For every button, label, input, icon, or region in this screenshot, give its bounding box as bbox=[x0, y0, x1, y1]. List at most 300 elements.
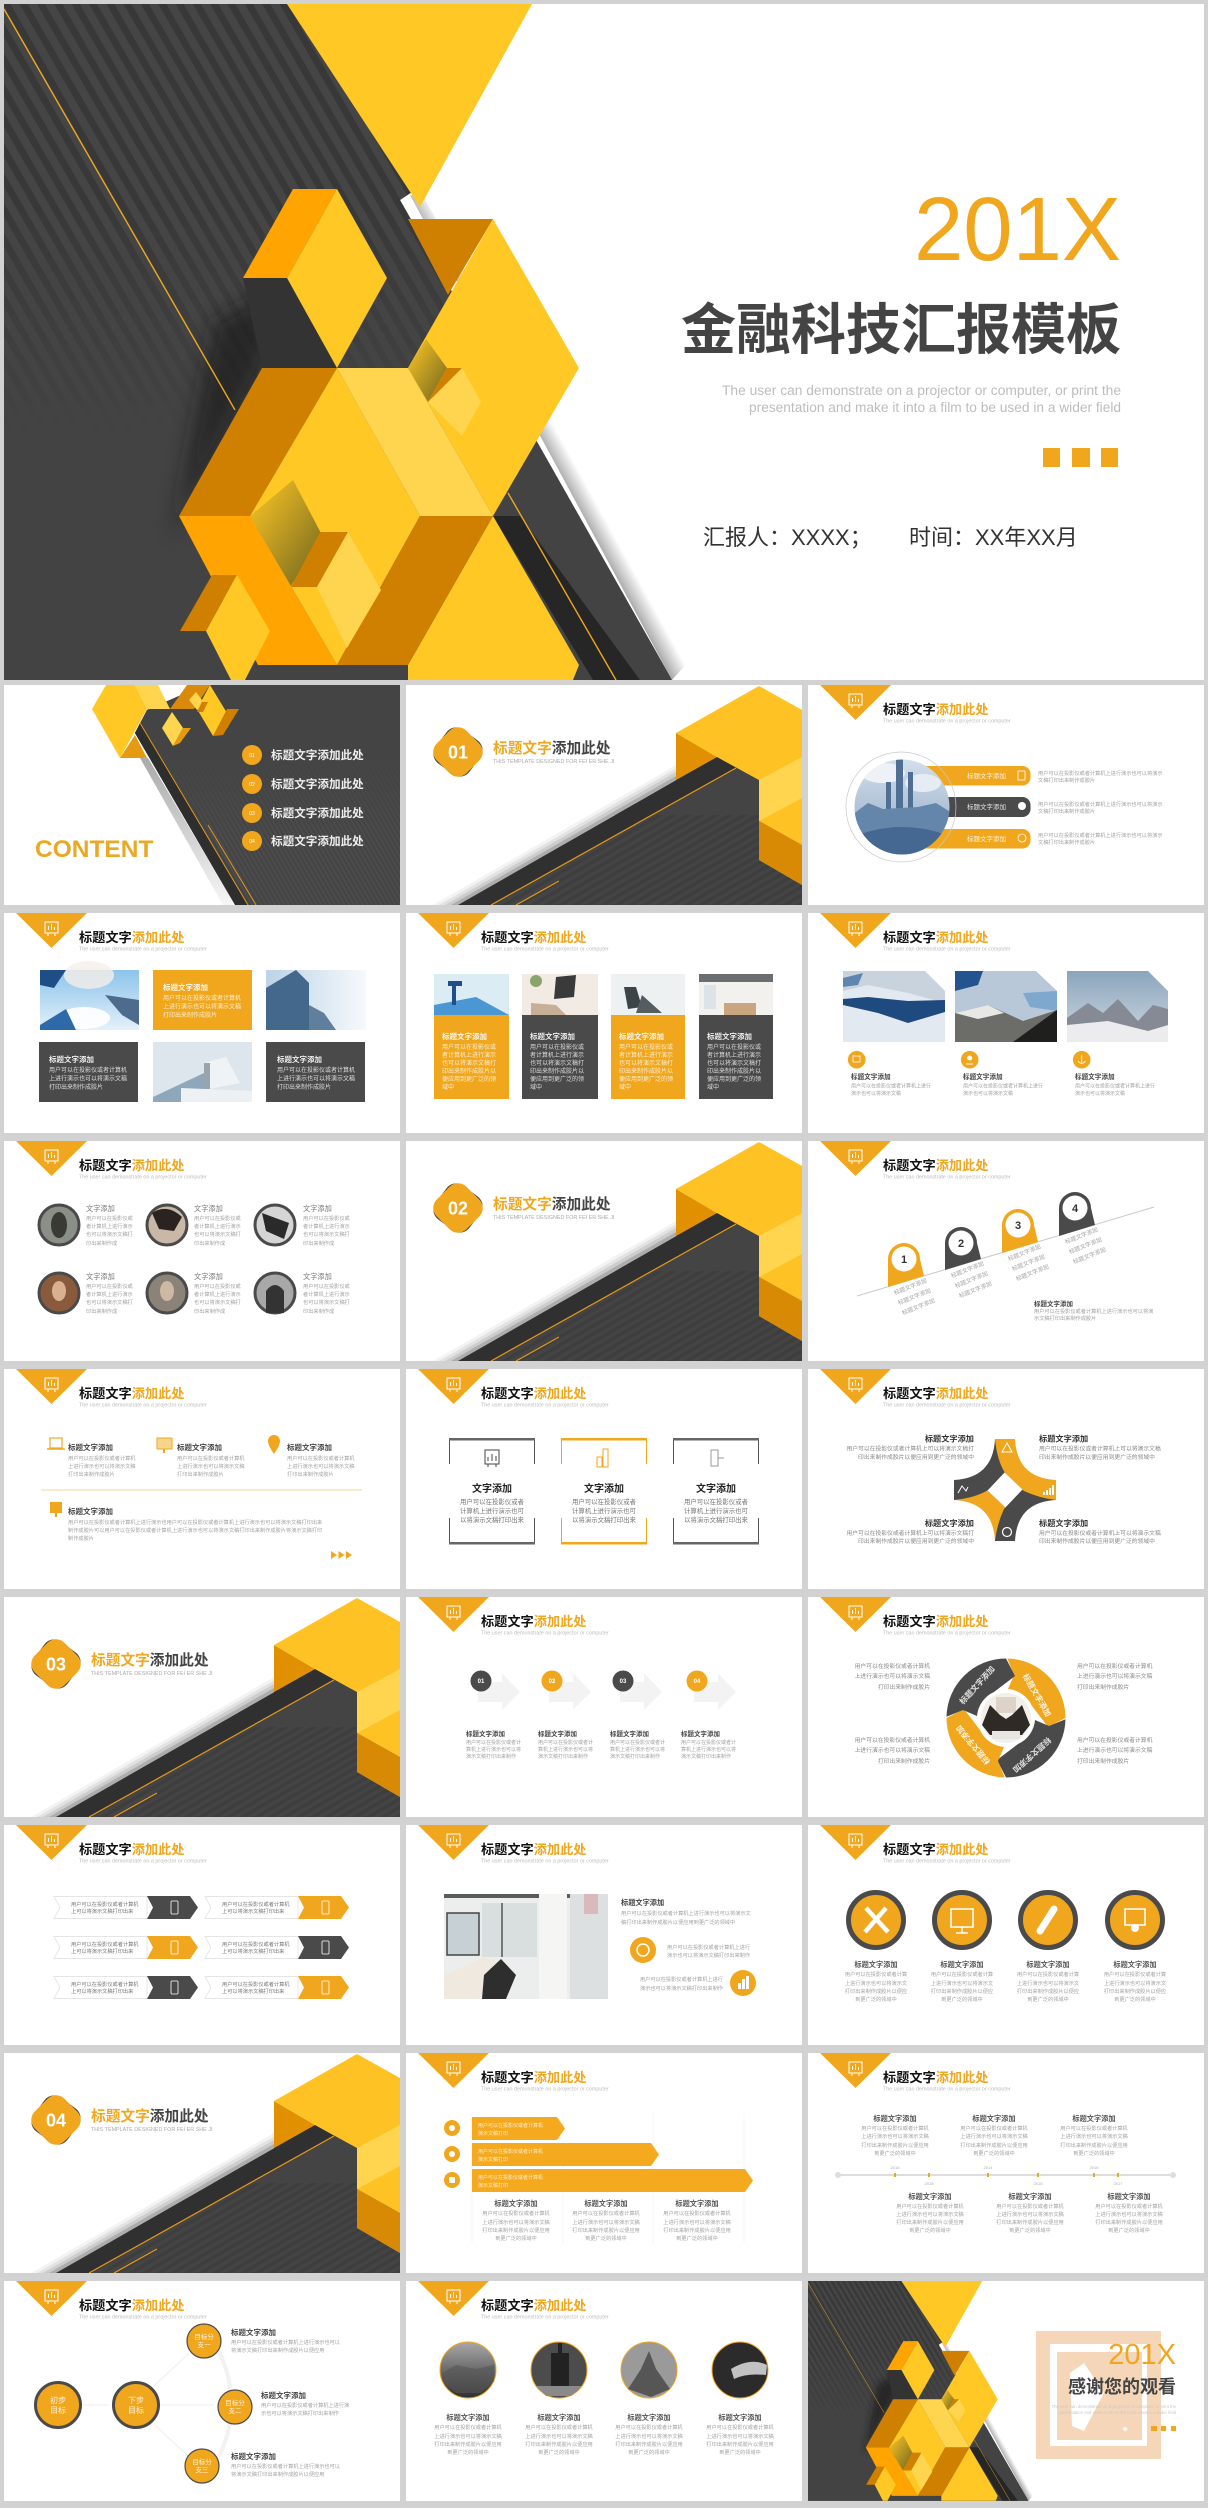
column 2: 标题文字添加 bbox=[530, 1031, 575, 1041]
column 1: 用户可以在投影仪或者计算机 bbox=[482, 2209, 551, 2217]
main title: 金融科技汇报模板 bbox=[681, 299, 1121, 361]
office photo bbox=[444, 1894, 608, 1999]
left lower text bbox=[855, 1736, 930, 1765]
header: The user can demonstrate on a projector or computer bbox=[883, 718, 1011, 724]
column 4: 域中 bbox=[707, 1083, 719, 1091]
column 2 bbox=[522, 974, 598, 1099]
city 2: 打印出来制作成胶片以便应用 bbox=[525, 2440, 593, 2448]
city 1: 用户可以在投影仪或者计算机 bbox=[434, 2423, 503, 2431]
cover artwork: hexagon shapes on dark stripes bbox=[4, 4, 690, 680]
city 4: 打印出来制作成胶片以便应用 bbox=[706, 2440, 774, 2448]
branch 3: 标题文字添加 bbox=[231, 2451, 276, 2461]
city photo circle bbox=[846, 752, 956, 862]
city 1: 上进行演示也可以将演示文稿 bbox=[434, 2432, 502, 2440]
top text 1: 上进行演示也可以将演示文稿 bbox=[861, 2132, 929, 2140]
orange text box: 打印出来制作成胶片 bbox=[163, 1011, 217, 1019]
step 4: 算机上进行演示也可以将 bbox=[681, 1746, 736, 1753]
section subtitle: THIS TEMPLATE DESIGNED FOR FEI ER SHE JI bbox=[493, 1215, 614, 1221]
person 1: 文字添加 bbox=[86, 1204, 115, 1213]
top text 3: 到更广泛的领域中 bbox=[1073, 2149, 1115, 2157]
header: The user can demonstrate on a projector or computer bbox=[883, 946, 1011, 952]
header: The user can demonstrate on a projector or computer bbox=[883, 1858, 1011, 1864]
column 4: 便应用到更广泛的领 bbox=[707, 1075, 761, 1083]
frame card 3: 计算机上进行演示也可 bbox=[684, 1506, 749, 1515]
column 2: 到更广泛的领域中 bbox=[585, 2234, 627, 2242]
frame card 1 bbox=[449, 1438, 535, 1544]
pill 1 bbox=[918, 766, 1030, 786]
header: 标题文字添加此处 bbox=[883, 1613, 988, 1629]
rotated captions: 标题文字添加 bbox=[901, 1296, 936, 1317]
top text 3 bbox=[1060, 2114, 1129, 2157]
column 2: 用户可以在投影仪或 bbox=[530, 1043, 584, 1051]
header: The user can demonstrate on a projector or computer bbox=[481, 1858, 609, 1864]
feature 1: 标题文字添加 bbox=[851, 1072, 891, 1081]
bottom text 1: 打印出来制作成胶片以便应用 bbox=[896, 2218, 964, 2226]
circle 4 certificate bbox=[1104, 1892, 1167, 2003]
column 3: 域中 bbox=[619, 1083, 631, 1091]
circle 4 certificate: 上进行演示也可以将演示文 bbox=[1104, 1979, 1167, 1987]
column 2: 用户可以在投影仪或者计算机 bbox=[572, 2209, 641, 2217]
slide: staggered arrow bars bbox=[406, 2053, 802, 2273]
panel: cover slide bbox=[4, 4, 1204, 680]
column 3: 者计算机上进行演示 bbox=[619, 1051, 673, 1059]
right lower text bbox=[1077, 1736, 1153, 1765]
column 3: 用户可以在投影仪或者计算机 bbox=[663, 2209, 732, 2217]
ring diagram bbox=[946, 1658, 1066, 1778]
top text 2: 用户可以在投影仪或者计算机 bbox=[960, 2124, 1029, 2132]
number badge 01 bbox=[433, 727, 483, 777]
note text: 用户可以在投影仪或者计算机上进行演示也可以将演示文 bbox=[621, 1909, 752, 1917]
step 2: 02 bbox=[549, 1679, 556, 1685]
left upper text: 用户可以在投影仪或者计算机 bbox=[855, 1662, 930, 1670]
rotated captions: 标题文字添加 bbox=[950, 1259, 985, 1280]
stamp watermark bbox=[1036, 2331, 1161, 2459]
dark text box bbox=[266, 1042, 365, 1102]
column 1: 标题文字添加 bbox=[442, 1031, 487, 1041]
top right text bbox=[1039, 1434, 1161, 1461]
column 1: 也可以将演示文稿打 bbox=[442, 1059, 496, 1067]
bottom text 3 bbox=[1095, 2192, 1164, 2234]
header bbox=[820, 685, 1011, 724]
slide: four city circles bbox=[406, 2281, 802, 2501]
agenda list: 03 bbox=[249, 811, 255, 817]
header bbox=[16, 2281, 207, 2320]
photo: white architecture bbox=[153, 1042, 252, 1102]
right lower text: 打印出来制作成胶片 bbox=[1077, 1757, 1129, 1765]
city 3 bbox=[615, 2342, 684, 2456]
agenda list: 标题文字添加此处 bbox=[271, 834, 364, 848]
slide: city circle with three pills bbox=[808, 685, 1204, 905]
feature 3: 打印出来制作成胶片 bbox=[287, 1470, 334, 1478]
person 1: 印出来制作成 bbox=[86, 1239, 117, 1247]
city 4: 标题文字添加 bbox=[718, 2413, 762, 2422]
subtitle: The user can demonstrate on a projector or computer, or print the bbox=[722, 383, 1121, 398]
header: The user can demonstrate on a projector or computer bbox=[79, 1402, 207, 1408]
tag 3: 上可以将演示文稿打印出来 bbox=[71, 1947, 134, 1955]
branch 3: 支三 bbox=[196, 2465, 209, 2474]
feature 1: 上进行演示也可以将演示文稿 bbox=[68, 1462, 135, 1470]
header bbox=[16, 1141, 207, 1180]
slide: section 02 bbox=[406, 1141, 802, 1361]
frame card 2: 以将演示文稿打印出来 bbox=[572, 1515, 637, 1524]
column 1: 域中 bbox=[442, 1083, 454, 1091]
header: 标题文字添加此处 bbox=[883, 929, 988, 945]
reporter and time: 汇报人：XXXX； bbox=[703, 525, 872, 550]
left upper text: 打印出来制作成胶片 bbox=[878, 1683, 930, 1691]
icon note 1: 用户可以在投影仪或者计算机上进行 bbox=[667, 1943, 750, 1951]
circle 3 tube: 打印出来制作成胶片以便应 bbox=[1017, 1987, 1079, 1995]
person 3: 文字添加 bbox=[303, 1204, 332, 1213]
top left text: 用户可以在投影仪或者计算机上可以将演示文稿打 bbox=[846, 1444, 974, 1452]
person 3 bbox=[255, 1204, 350, 1247]
feature wide: 制作成胶片 bbox=[68, 1534, 94, 1542]
top text 2 bbox=[960, 2114, 1029, 2157]
top left text bbox=[846, 1434, 974, 1461]
pill descriptions: 用户可以在投影仪或者计算机上进行演示也可以将演示 bbox=[1038, 831, 1163, 839]
header bbox=[820, 1369, 1011, 1408]
feature 2: 标题文字添加 bbox=[963, 1072, 1003, 1081]
column 3: 印出来制作成胶片以 bbox=[619, 1067, 673, 1075]
circle 2 monitor: 标题文字添加 bbox=[940, 1960, 984, 1969]
tag 2: 上可以将演示文稿打印出来 bbox=[222, 1907, 285, 1915]
branch 2: 示也可以将演示文稿打印出来制作 bbox=[261, 2409, 339, 2417]
person 3: 也可以将演示文稿打 bbox=[303, 1230, 350, 1238]
person 5: 也可以将演示文稿打 bbox=[194, 1298, 241, 1306]
branch 1: 标题文字添加 bbox=[231, 2327, 276, 2337]
number badge 01: 01 bbox=[448, 742, 468, 762]
person 5: 者计算机上进行演示 bbox=[194, 1290, 241, 1298]
section title: 标题文字添加此处 bbox=[91, 1651, 209, 1669]
person 4: 文字添加 bbox=[86, 1272, 115, 1281]
small caption: presentation and make it into a film to be used in a wider field bbox=[1059, 2410, 1177, 2415]
header: 标题文字添加此处 bbox=[481, 1385, 586, 1401]
pill descriptions bbox=[1038, 769, 1163, 846]
frame card 3 bbox=[673, 1438, 759, 1544]
top text 3: 上进行演示也可以将演示文稿 bbox=[1060, 2132, 1128, 2140]
header: The user can demonstrate on a projector or computer bbox=[481, 946, 609, 952]
right upper text: 打印出来制作成胶片 bbox=[1077, 1683, 1129, 1691]
person 3: 者计算机上进行演示 bbox=[303, 1222, 350, 1230]
feature 1: 打印出来制作成胶片 bbox=[68, 1470, 115, 1478]
tag 2 bbox=[205, 1896, 349, 1919]
feature 1 bbox=[47, 1438, 136, 1478]
person 1: 者计算机上进行演示 bbox=[86, 1222, 133, 1230]
column 2: 域中 bbox=[530, 1083, 542, 1091]
left lower text: 上进行演示也可以将演示文稿 bbox=[855, 1746, 930, 1754]
rotated captions bbox=[893, 1225, 1107, 1317]
pill descriptions: 文稿打印出来制作成胶片 bbox=[1038, 776, 1095, 784]
header: The user can demonstrate on a projector or computer bbox=[883, 2086, 1011, 2092]
bottom text 2: 用户可以在投影仪或者计算机 bbox=[996, 2202, 1065, 2210]
header: The user can demonstrate on a projector or computer bbox=[883, 1174, 1011, 1180]
step 3: 用户可以在投影仪或者计 bbox=[610, 1739, 665, 1746]
bottom text 2: 标题文字添加 bbox=[1008, 2192, 1052, 2201]
header: The user can demonstrate on a projector or computer bbox=[79, 946, 207, 952]
person 4: 印出来制作成 bbox=[86, 1307, 117, 1315]
column 2: 也可以将演示文稿打 bbox=[530, 1059, 584, 1067]
header: 标题文字添加此处 bbox=[79, 1841, 184, 1857]
bar 3: 演示文稿打印 bbox=[478, 2182, 508, 2189]
dark text box: 上进行演示也可以将演示文稿 bbox=[49, 1074, 127, 1082]
header: The user can demonstrate on a projector or computer bbox=[481, 2086, 609, 2092]
feature 2: 打印出来制作成胶片 bbox=[177, 1470, 224, 1478]
header bbox=[16, 913, 207, 952]
branch 2: 标题文字添加 bbox=[261, 2390, 306, 2400]
column 2: 便应用到更广泛的领 bbox=[530, 1075, 584, 1083]
column 1: 上进行演示也可以将演示文稿 bbox=[482, 2218, 550, 2226]
section title: 标题文字添加此处 bbox=[91, 2107, 209, 2125]
pill 3 bbox=[918, 829, 1030, 848]
bottom text 2: 到更广泛的领域中 bbox=[1009, 2226, 1051, 2234]
slide: section 01 bbox=[406, 685, 802, 905]
column 1: 便应用到更广泛的领 bbox=[442, 1075, 496, 1083]
bottom text 1: 到更广泛的领域中 bbox=[909, 2226, 951, 2234]
year heading: 201X bbox=[914, 180, 1121, 280]
feature wide bbox=[50, 1502, 323, 1542]
header bbox=[418, 1597, 609, 1636]
branch 1: 目标分 bbox=[194, 2332, 214, 2341]
dark text box: 用户可以在投影仪或者计算机 bbox=[277, 1066, 355, 1074]
bottom left text bbox=[846, 1518, 974, 1545]
circle 1 tools: 打印出来制作成胶片以便应 bbox=[845, 1987, 907, 1995]
city 3: 到更广泛的领域中 bbox=[628, 2448, 670, 2456]
column 3: 标题文字添加 bbox=[675, 2199, 719, 2208]
timeline axis bbox=[835, 2165, 1176, 2186]
bottom text 3: 打印出来制作成胶片以便应用 bbox=[1095, 2218, 1163, 2226]
pin 1 bbox=[888, 1243, 924, 1287]
pill 2: 标题文字添加 bbox=[967, 802, 1006, 811]
city 2 bbox=[525, 2342, 594, 2456]
person 4: 用户可以在投影仪或 bbox=[86, 1282, 133, 1290]
pin 2: 2 bbox=[958, 1238, 964, 1250]
frame card 1: 计算机上进行演示也可 bbox=[460, 1506, 525, 1515]
number badge 04: 04 bbox=[46, 2110, 66, 2130]
top text 2: 标题文字添加 bbox=[972, 2114, 1016, 2123]
header bbox=[418, 913, 609, 952]
section title: 标题文字添加此处 bbox=[493, 739, 611, 757]
star diagram bbox=[954, 1439, 1056, 1541]
number badge 02: 02 bbox=[448, 1198, 468, 1218]
tag 4: 用户可以在投影仪或者计算机 bbox=[222, 1940, 290, 1948]
person 5: 印出来制作成 bbox=[194, 1307, 225, 1315]
dark text box: 打印出来制作成胶片 bbox=[277, 1083, 331, 1091]
header: 标题文字添加此处 bbox=[79, 1385, 184, 1401]
ring diagram: 标题文字添加 bbox=[957, 1664, 997, 1706]
person 3: 用户可以在投影仪或 bbox=[303, 1214, 350, 1222]
slide: six portraits bbox=[4, 1141, 400, 1361]
header: 标题文字添加此处 bbox=[481, 929, 586, 945]
circle 1 tools: 上进行演示也可以将演示文 bbox=[845, 1979, 908, 1987]
tag 6 bbox=[205, 1976, 349, 1999]
column 3: 便应用到更广泛的领 bbox=[619, 1075, 673, 1083]
branch 2: 目标分 bbox=[225, 2398, 245, 2407]
city 2: 到更广泛的领域中 bbox=[538, 2448, 580, 2456]
bottom text 3: 用户可以在投影仪或者计算机 bbox=[1095, 2202, 1164, 2210]
city 1 bbox=[434, 2342, 503, 2456]
top text 2: 打印出来制作成胶片以便应用 bbox=[960, 2141, 1028, 2149]
frame card 2: 计算机上进行演示也可 bbox=[572, 1506, 637, 1515]
bottom text 1 bbox=[896, 2192, 965, 2234]
bottom text 1: 标题文字添加 bbox=[908, 2192, 952, 2201]
person 3: 印出来制作成 bbox=[303, 1239, 334, 1247]
top text 2: 上进行演示也可以将演示文稿 bbox=[960, 2132, 1028, 2140]
step 2: 标题文字添加 bbox=[538, 1729, 577, 1738]
branch 2: 用户可以在投影仪或者计算机上进行演 bbox=[261, 2401, 349, 2409]
feature 3: 上进行演示也可以将演示文稿 bbox=[287, 1462, 354, 1470]
timeline axis: 2016 bbox=[891, 2165, 900, 2170]
feature 3: 标题文字添加 bbox=[287, 1442, 332, 1452]
reporter and time: 时间：XX年XX月 bbox=[909, 525, 1078, 550]
slide: thank you bbox=[808, 2281, 1204, 2501]
slide: ring cycle bbox=[808, 1597, 1204, 1817]
header: 标题文字添加此处 bbox=[481, 1613, 586, 1629]
pin 3: 3 bbox=[1015, 1220, 1021, 1232]
column 3: 用户可以在投影仪或 bbox=[619, 1043, 673, 1051]
person 2: 也可以将演示文稿打 bbox=[194, 1230, 241, 1238]
note text: 稿打印出来制作成胶片以便应用到更广泛的领域中 bbox=[621, 1918, 735, 1926]
header bbox=[16, 1825, 207, 1864]
header: 标题文字添加此处 bbox=[79, 929, 184, 945]
bottom left text: 印出来制作成胶片以便应用到更广泛的领域中 bbox=[858, 1537, 974, 1545]
mountain photo 1 bbox=[843, 971, 945, 1042]
rotated captions: 标题文字添加 bbox=[893, 1276, 928, 1297]
header: The user can demonstrate on a projector or computer bbox=[481, 2314, 609, 2320]
header bbox=[820, 1141, 1011, 1180]
tag 6: 用户可以在投影仪或者计算机 bbox=[222, 1980, 290, 1988]
tag 1: 用户可以在投影仪或者计算机 bbox=[71, 1900, 139, 1908]
header bbox=[820, 2053, 1011, 2092]
header: 标题文字添加此处 bbox=[481, 1841, 586, 1857]
section subtitle: THIS TEMPLATE DESIGNED FOR FEI ER SHE JI bbox=[91, 2127, 212, 2133]
circle 4 certificate: 标题文字添加 bbox=[1113, 1960, 1157, 1969]
person 6: 印出来制作成 bbox=[303, 1307, 334, 1315]
slide: three mountains bbox=[808, 913, 1204, 1133]
bar 2: 演示文稿打印 bbox=[478, 2156, 508, 2163]
node: next goal bbox=[114, 2382, 158, 2428]
step 1: 标题文字添加 bbox=[466, 1729, 505, 1738]
rotated captions: 标题文字添加 bbox=[1072, 1245, 1107, 1266]
column 4: 标题文字添加 bbox=[707, 1031, 752, 1041]
bottom text 3: 标题文字添加 bbox=[1107, 2192, 1151, 2201]
header: The user can demonstrate on a projector or computer bbox=[883, 1402, 1011, 1408]
dark text box: 标题文字添加 bbox=[277, 1054, 322, 1064]
orange text box: 标题文字添加 bbox=[163, 982, 208, 992]
pin 1: 1 bbox=[901, 1254, 907, 1266]
city 1: 标题文字添加 bbox=[446, 2413, 490, 2422]
bottom left text: 标题文字添加 bbox=[925, 1518, 974, 1528]
step 4 bbox=[681, 1670, 736, 1760]
header bbox=[820, 1597, 1011, 1636]
step 1: 01 bbox=[478, 1679, 485, 1685]
three squares bbox=[1151, 2426, 1176, 2431]
feature 2 bbox=[961, 1051, 1043, 1097]
circle 4 certificate: 用户可以在投影仪或者计算 bbox=[1104, 1970, 1166, 1978]
dark text box: 标题文字添加 bbox=[49, 1054, 94, 1064]
pin 2 bbox=[945, 1227, 981, 1270]
city 3: 上进行演示也可以将演示文稿 bbox=[615, 2432, 683, 2440]
header bbox=[418, 1369, 609, 1408]
circle 1 tools: 标题文字添加 bbox=[854, 1960, 898, 1969]
person 1 bbox=[39, 1204, 133, 1247]
column 4 bbox=[699, 974, 773, 1099]
column 1: 用户可以在投影仪或 bbox=[442, 1043, 496, 1051]
person 4: 者计算机上进行演示 bbox=[86, 1290, 133, 1298]
pill 2 bbox=[948, 797, 1030, 817]
icons bbox=[444, 2120, 460, 2188]
icon note 2: 用户可以在投影仪或者计算机上进行 bbox=[640, 1975, 723, 1983]
frame card 3: 以将演示文稿打印出来 bbox=[684, 1515, 749, 1524]
pill descriptions: 用户可以在投影仪或者计算机上进行演示也可以将演示 bbox=[1038, 800, 1163, 808]
tag 1: 上可以将演示文稿打印出来 bbox=[71, 1907, 134, 1915]
header: 标题文字添加此处 bbox=[481, 2069, 586, 2085]
agenda list: 01 bbox=[249, 753, 255, 759]
number badge 02 bbox=[428, 1178, 488, 1238]
slide: four step arrows bbox=[406, 1597, 802, 1817]
step 1 bbox=[466, 1670, 521, 1760]
bottom text 2: 打印出来制作成胶片以便应用 bbox=[996, 2218, 1064, 2226]
header: 标题文字添加此处 bbox=[883, 701, 988, 717]
step 3 bbox=[610, 1670, 665, 1760]
feature 1: 演示也可以将演示文稿 bbox=[851, 1090, 901, 1097]
pill 3: 标题文字添加 bbox=[967, 834, 1006, 843]
bottom note: 用户可以在投影仪或者计算机上进行演示也可以将演 bbox=[1034, 1307, 1153, 1315]
agenda list: 02 bbox=[249, 782, 255, 788]
header bbox=[418, 2281, 609, 2320]
column 1: 者计算机上进行演示 bbox=[442, 1051, 496, 1059]
tag 5: 用户可以在投影仪或者计算机 bbox=[71, 1980, 139, 1988]
bottom right text bbox=[1039, 1518, 1161, 1545]
step 4: 04 bbox=[694, 1679, 701, 1685]
tag 3 bbox=[54, 1936, 198, 1959]
city 3: 标题文字添加 bbox=[627, 2413, 671, 2422]
branch 3: 用户可以在投影仪或者计算机上进行演示也可以 bbox=[231, 2462, 340, 2470]
pin 3 bbox=[1002, 1209, 1038, 1253]
feature 3 bbox=[268, 1435, 355, 1478]
person 6: 也可以将演示文稿打 bbox=[303, 1298, 350, 1306]
small caption bbox=[1052, 2404, 1177, 2415]
note text: 标题文字添加 bbox=[621, 1898, 664, 1907]
top text 1 bbox=[861, 2114, 930, 2157]
city 1: 到更广泛的领域中 bbox=[447, 2448, 489, 2456]
small caption: The user can demonstrate on a projector or computer, or print the bbox=[1052, 2404, 1177, 2409]
left upper text: 上进行演示也可以将演示文稿 bbox=[855, 1672, 930, 1680]
column 2 bbox=[572, 2199, 641, 2242]
column 2: 上进行演示也可以将演示文稿 bbox=[572, 2218, 640, 2226]
feature 1 bbox=[848, 1051, 931, 1097]
node: first goal bbox=[36, 2382, 80, 2428]
ring diagram: 标题文字添加 bbox=[1021, 1672, 1053, 1718]
rotated captions: 标题文字添加 bbox=[1015, 1262, 1050, 1283]
branch 2: 支二 bbox=[228, 2406, 242, 2415]
left lower text: 打印出来制作成胶片 bbox=[878, 1757, 930, 1765]
step 2: 用户可以在投影仪或者计 bbox=[538, 1739, 593, 1746]
pill descriptions: 用户可以在投影仪或者计算机上进行演示也可以将演示 bbox=[1038, 769, 1163, 777]
header bbox=[820, 1825, 1011, 1864]
top text 1: 标题文字添加 bbox=[873, 2114, 917, 2123]
rotated captions: 标题文字添加 bbox=[954, 1269, 989, 1290]
reporter and time bbox=[703, 525, 1078, 550]
circle 2 monitor: 上进行演示也可以将演示文 bbox=[931, 1979, 994, 1987]
agenda list: 标题文字添加此处 bbox=[271, 748, 364, 762]
feature 1: 标题文字添加 bbox=[68, 1442, 113, 1452]
tag 3: 用户可以在投影仪或者计算机 bbox=[71, 1940, 139, 1948]
feature wide: 标题文字添加 bbox=[68, 1506, 113, 1516]
person 5: 用户可以在投影仪或 bbox=[194, 1282, 241, 1290]
CONTENT heading: CONTENT bbox=[35, 836, 153, 863]
tag 5 bbox=[54, 1976, 198, 1999]
rotated captions: 标题文字添加 bbox=[1068, 1235, 1103, 1256]
frame card 3: 文字添加 bbox=[696, 1482, 736, 1495]
